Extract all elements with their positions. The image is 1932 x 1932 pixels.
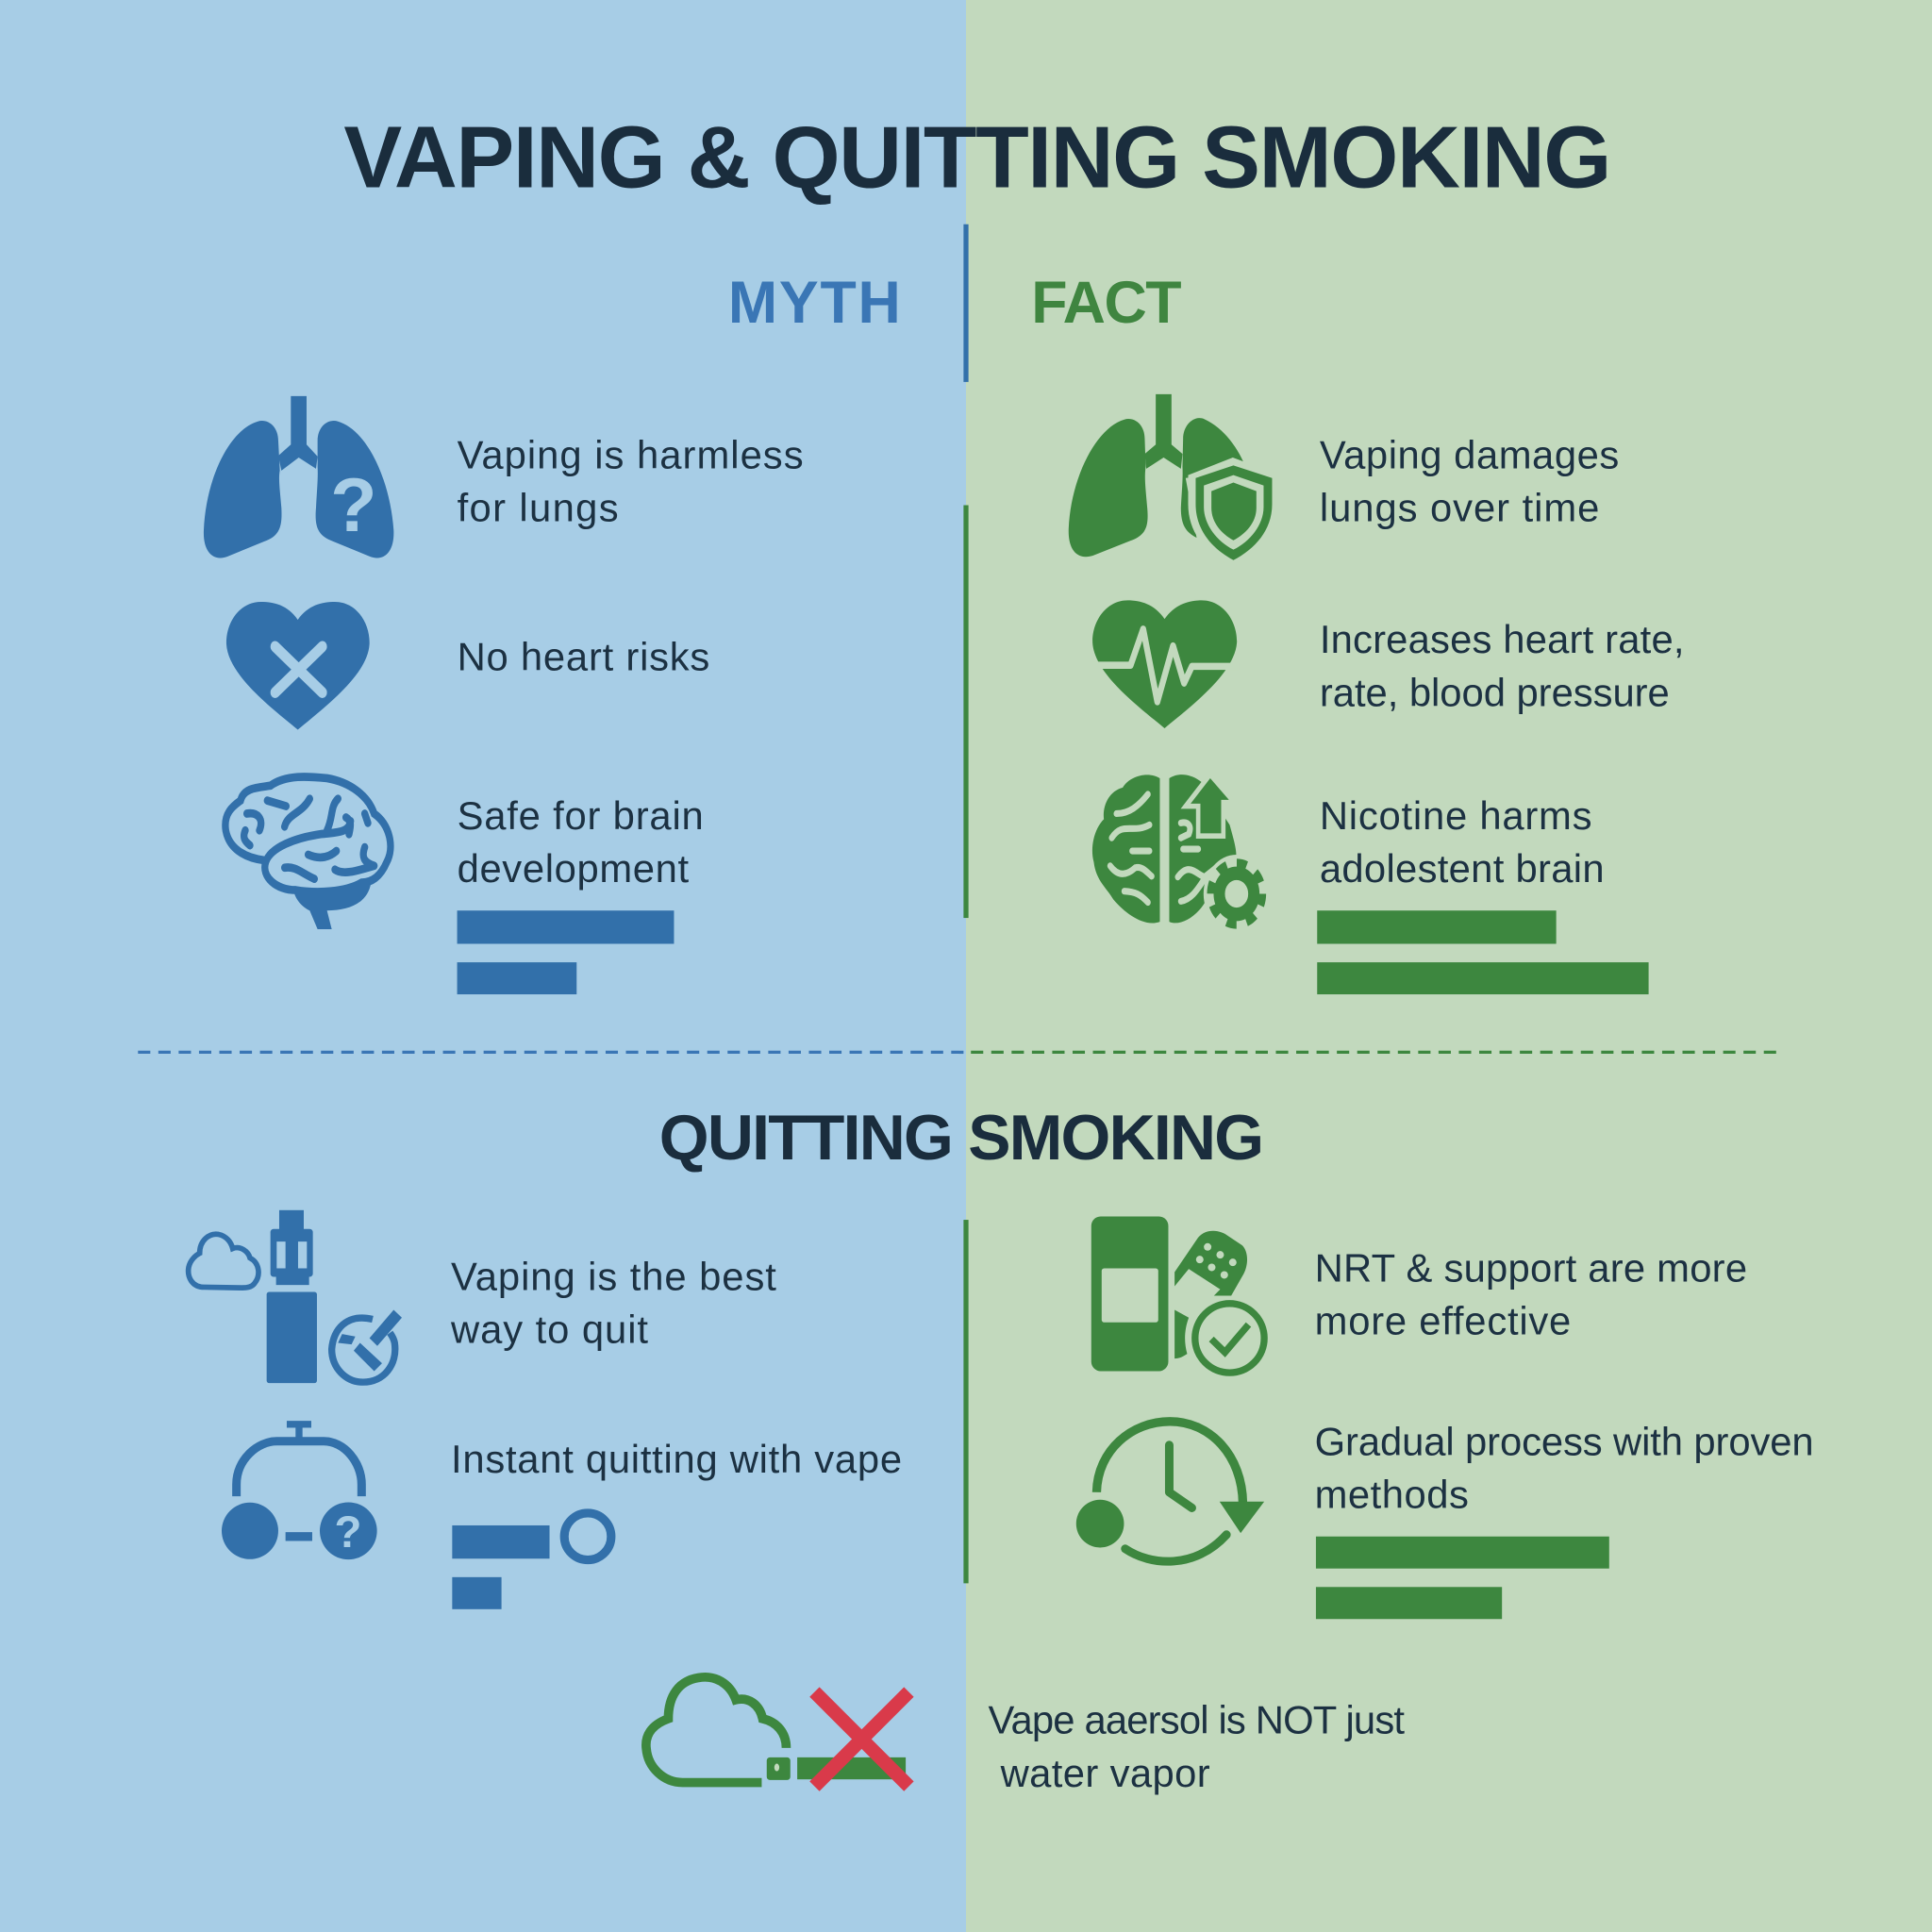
- bars: myth brain: [458, 910, 674, 994]
- text: myth best way: way to quit: [450, 1307, 648, 1352]
- panel: myth background: [0, 0, 966, 1932]
- icon: cloud and vape crossed out: [646, 1677, 908, 1787]
- icon: lungs with question mark: [204, 396, 393, 558]
- center divider: header: [963, 225, 969, 382]
- icon: brain with arrow and gear: [1092, 774, 1270, 933]
- panel: fact background: [966, 0, 1932, 1932]
- icon: nicotine patch and check: [1091, 1216, 1264, 1373]
- text: myth instant: Instant quitting with vape: [451, 1437, 902, 1481]
- text: fact brain: [1320, 793, 1605, 891]
- text: fact brain: adolestent brain: [1320, 846, 1605, 891]
- text: myth brain: development: [458, 846, 690, 891]
- icon: clock with circular arrow: [1076, 1422, 1264, 1561]
- icon: timer path with question: ?: [335, 1507, 361, 1557]
- dashed divider: [138, 1051, 1783, 1054]
- text: aerosol callout: Vape aaersol is NOT just: [989, 1698, 1405, 1742]
- bars: myth instant: [452, 1513, 611, 1609]
- text: fact lungs: lungs over time: [1320, 485, 1599, 529]
- text: fact heart: Increases heart rate,: [1320, 617, 1684, 661]
- text: fact NRT: more effective: [1315, 1299, 1571, 1343]
- text: aerosol callout: water vapor: [1000, 1751, 1210, 1795]
- text: fact heart: rate, blood pressure: [1320, 670, 1670, 714]
- text: fact brain: Nicotine harms: [1320, 793, 1592, 838]
- text: myth brain: [458, 793, 704, 891]
- center divider: facts upper: [963, 506, 969, 918]
- icon: heart with x: [226, 602, 370, 730]
- heading: fact: FACT: [1031, 270, 1182, 336]
- center divider: facts lower: [963, 1220, 969, 1583]
- text: myth lungs: Vaping is harmless: [458, 432, 804, 476]
- icon: timer path with question: [222, 1421, 377, 1559]
- icon: lungs with question mark: ?: [330, 463, 377, 548]
- text: myth lungs: for lungs: [458, 485, 619, 529]
- text: fact NRT: [1315, 1245, 1747, 1343]
- bars: fact brain: [1317, 910, 1649, 994]
- text: fact NRT: NRT & support are more: [1315, 1245, 1747, 1290]
- icon: heart with pulse: [1092, 600, 1239, 728]
- bars: fact gradual: [1316, 1537, 1609, 1619]
- text: fact heart: [1320, 617, 1684, 714]
- icon: lungs with shield: [1069, 394, 1280, 568]
- text: fact gradual: Gradual process with proven: [1315, 1420, 1814, 1464]
- text: fact gradual: [1315, 1420, 1814, 1517]
- heading: myth: MYTH: [728, 270, 901, 336]
- text: fact lungs: [1320, 432, 1619, 529]
- text: myth lungs: [458, 432, 804, 529]
- icon: brain outline: [225, 776, 391, 929]
- text: fact lungs: Vaping damages: [1320, 432, 1619, 476]
- text: myth brain: Safe for brain: [458, 793, 704, 838]
- title: VAPING & QUITTING SMOKING: [343, 108, 1611, 207]
- text: myth heart: No heart risks: [458, 635, 709, 679]
- heading: quitting smoking: QUITTING SMOKING: [659, 1103, 1264, 1174]
- text: fact gradual: methods: [1315, 1473, 1469, 1517]
- text: aerosol callout: [989, 1698, 1405, 1795]
- icon: vape device with cloud and no-smoking sign: [189, 1210, 402, 1383]
- text: myth best way: [450, 1255, 776, 1352]
- text: myth best way: Vaping is the best: [451, 1255, 776, 1299]
